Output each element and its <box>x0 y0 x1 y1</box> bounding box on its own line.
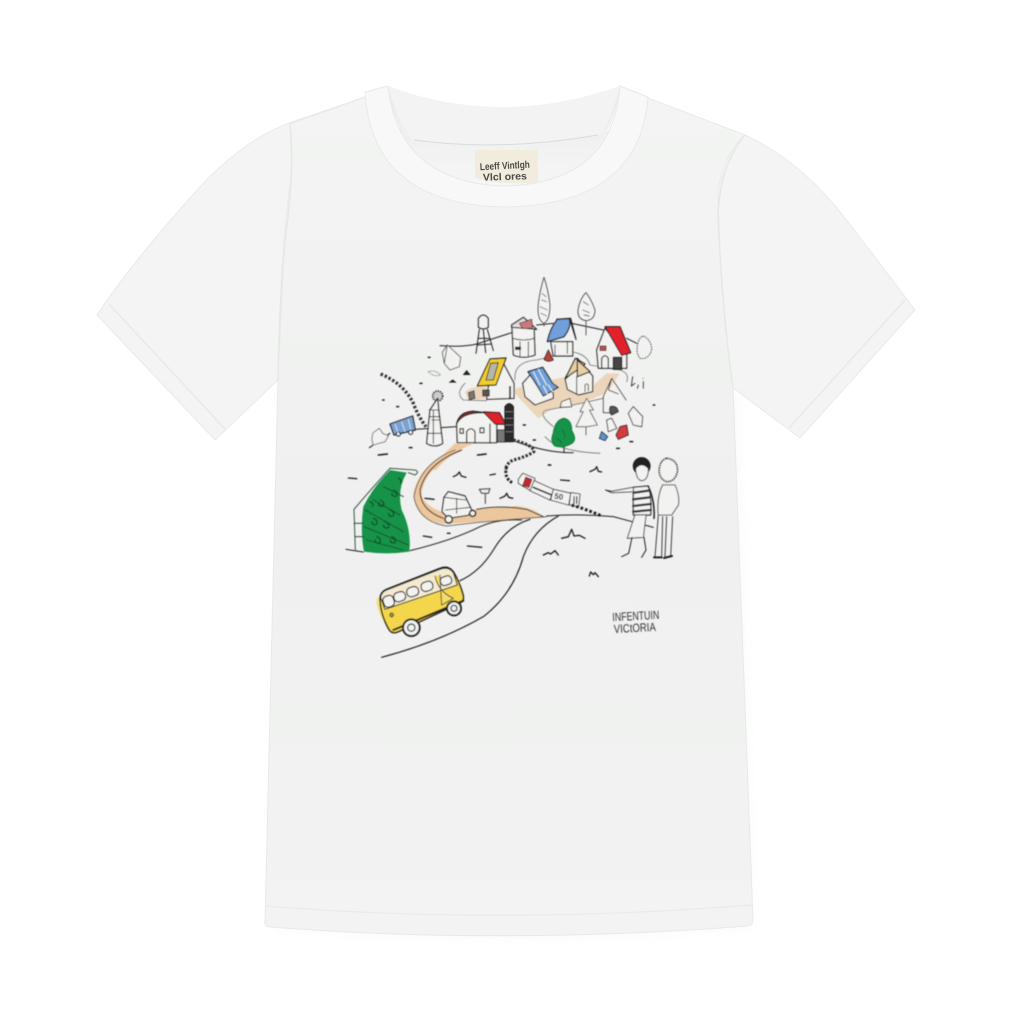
neck label: Leeff Vintlgh <box>480 160 530 173</box>
boulders <box>607 418 617 432</box>
people small <box>631 377 643 388</box>
back collar <box>388 86 620 146</box>
print signature: INFENTUIN <box>612 608 660 624</box>
lower scene: road and figures <box>346 450 679 657</box>
bottom hem stitch <box>266 905 752 915</box>
bush right <box>637 336 652 359</box>
yellow roof house <box>468 358 514 400</box>
pine trees <box>576 398 597 435</box>
ground sand <box>512 373 620 418</box>
signpost <box>479 489 490 503</box>
tree tall <box>538 277 550 326</box>
small engine <box>372 428 388 445</box>
tree round <box>578 293 595 335</box>
village paths <box>460 352 627 453</box>
blue roof house <box>544 318 576 361</box>
tan roof house <box>565 358 593 395</box>
upper scene: village <box>369 277 655 470</box>
green hedge <box>354 468 417 553</box>
right sleeve <box>718 135 915 438</box>
orange road <box>413 450 543 524</box>
red roof house <box>597 327 631 369</box>
companion <box>654 458 679 558</box>
black mounds <box>449 370 471 383</box>
silo <box>505 404 513 442</box>
neck label: Vlcl ores <box>483 171 528 184</box>
tufts <box>378 357 655 465</box>
tuk tuk <box>442 492 476 523</box>
neck label <box>475 150 538 184</box>
print signature <box>612 608 660 636</box>
track into lower scene <box>506 440 534 470</box>
collar ribbing <box>365 86 648 207</box>
blue wagon <box>390 416 415 436</box>
water tower <box>476 315 493 353</box>
barn <box>457 411 506 443</box>
sleeve hems <box>109 300 905 429</box>
blue striped house <box>523 367 558 405</box>
windmill <box>427 391 443 446</box>
green tree <box>552 418 574 452</box>
railway <box>381 374 426 427</box>
shirt body <box>265 97 753 936</box>
print signature: VICtORIA <box>613 620 656 636</box>
neck interior <box>388 86 620 186</box>
left sleeve <box>97 97 365 440</box>
school bus <box>376 567 463 636</box>
boy pointing <box>605 458 654 557</box>
illustration print <box>346 277 679 657</box>
A-frame tent house <box>603 378 626 413</box>
ground lines <box>346 515 653 552</box>
main road <box>382 516 558 657</box>
road to barn <box>431 443 472 470</box>
hill line <box>369 323 637 453</box>
lower scene: road and figures: 50 <box>554 491 565 502</box>
t-shirt <box>97 86 915 936</box>
far left small house <box>442 345 461 370</box>
tower house <box>512 317 537 357</box>
tufts <box>348 454 602 577</box>
train <box>506 467 602 516</box>
